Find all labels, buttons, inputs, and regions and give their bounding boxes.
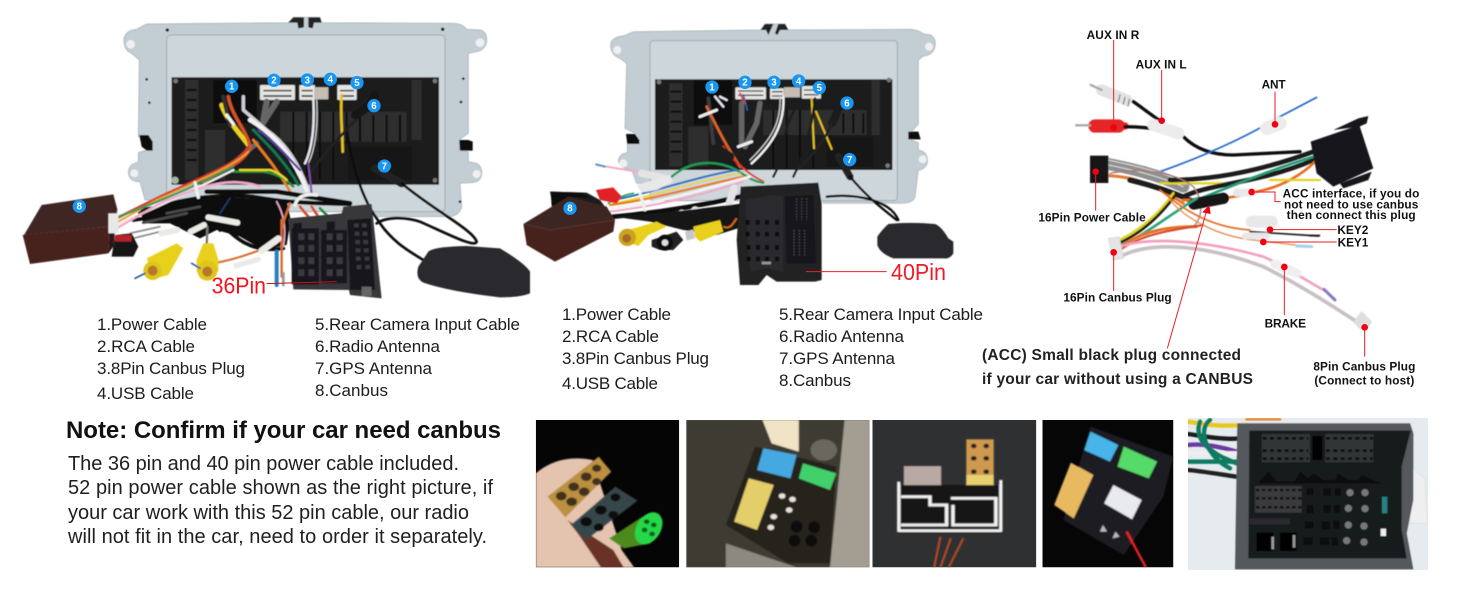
parts list: 36 pin: 6.Radio Antenna [315,337,441,356]
note body text: 52 pin power cable shown as the right picture, if [68,477,493,499]
40 pin connector [737,183,822,285]
label: KEY2: KEY2 [1337,223,1369,237]
label: BRAKE: BRAKE [1265,316,1306,330]
ACC plug note: if your car without using a CANBUS [982,371,1253,388]
canbus box 8 [523,197,615,230]
label: ANT: ANT [1262,77,1286,91]
parts list: 36 pin: 1.Power Cable [97,315,207,334]
parts list: 40 pin [562,305,983,393]
GPS antenna [877,223,953,258]
badges 1 to 8: 6 [371,101,377,112]
36 pin connector [288,204,382,298]
badges 1 to 8: 4 [328,75,334,86]
label: AUX IN L: AUX IN L [1136,58,1187,72]
label: ACC interface [1283,187,1419,222]
photo: plug block with white outline [873,420,1036,567]
16 pin canbus plug [1108,237,1124,260]
ACC plug note: (ACC) Small black plug connected [982,347,1241,364]
badges 1 to 8: 5 [817,83,823,94]
label: 8Pin Canbus Plug: 8Pin Canbus Plug [1313,360,1415,374]
ISO connector [1311,125,1373,187]
RCA plugs [1076,85,1357,322]
label: ACC interface: not need to use canbus [1284,197,1419,211]
badges 1 to 8: 6 [844,98,850,109]
black rear panel [172,77,439,185]
label: 8Pin Canbus Plug: (Connect to host) [1314,374,1414,388]
parts list: 40 pin: 3.8Pin Canbus Plug [562,349,709,368]
label: 16Pin Canbus Plug: 16Pin Canbus Plug [1063,291,1172,305]
GPS antenna [417,246,530,297]
red leader lines [1092,40,1368,357]
36Pin callout: 36Pin [212,272,266,298]
badges 1 to 8: 7 [382,161,387,172]
photo strip: plug examples [536,420,1173,567]
label: 16Pin Power Cable: 16Pin Power Cable [1038,210,1146,224]
parts list: 40 pin: 5.Rear Camera Input Cable [779,305,983,324]
badges 1 to 8: 1 [229,82,235,93]
mounting plate [611,24,935,203]
badges 1 to 8: 2 [271,76,277,87]
white plug at box [108,213,118,233]
black rear panel [655,79,892,170]
black cable loom [130,196,350,250]
parts list: 36 pin: 3.8Pin Canbus Plug [97,359,245,378]
photo: 52 pin connector [1188,418,1428,570]
badges 1 to 8: 8 [77,202,83,213]
harness diagram with labels [1038,28,1419,388]
wire bundles [1108,164,1183,187]
badges 1 to 8 [563,74,856,215]
badges 1 to 8: 4 [796,76,802,87]
parts list: 36 pin: 7.GPS Antenna [315,359,433,378]
parts list: 40 pin: 4.USB Cable [562,374,658,393]
16 pin power plug [1090,156,1108,183]
label: ACC interface: ACC interface, if you do [1283,187,1419,201]
label: 8Pin Canbus Plug [1313,360,1415,388]
label: KEY1: KEY1 [1338,236,1369,250]
40Pin callout [806,259,946,285]
note body text [67,453,493,548]
note body text: your car work with this 52 pin cable, our radio [68,502,469,524]
photo: hand holding plugs [536,420,679,567]
parts list: 36 pin: 4.USB Cable [97,384,194,403]
label: ACC interface: then connect this plug [1287,208,1416,222]
parts list: 40 pin: 8.Canbus [779,371,851,390]
40Pin callout: 40Pin [891,259,946,285]
photo: coloured plug block [1043,420,1173,567]
heading: canbus note: Note: Confirm if your car need canbus [66,417,501,444]
badges 1 to 8: 7 [847,155,852,166]
note body text: The 36 pin and 40 pin power cable included. [68,453,459,475]
parts list: 40 pin: 7.GPS Antenna [779,349,896,368]
plug row [735,86,821,99]
badges 1 to 8: 5 [354,78,360,89]
mounting plate [124,17,487,217]
yellow RCA plugs [135,243,218,281]
plug row [260,85,357,100]
badges 1 to 8: 3 [771,78,777,89]
ACC plug note [982,347,1253,388]
photo: radio back with 40 pin harness [523,24,953,285]
note body text: will not fit in the car, need to order it separately. [67,526,487,548]
wires from plugs [117,95,477,285]
badges 1 to 8: 2 [742,78,748,89]
badges 1 to 8: 1 [709,82,715,93]
photo: radio back with 36 pin harness [23,17,530,298]
36Pin callout [212,272,337,298]
parts list: 36 pin: 5.Rear Camera Input Cable [315,315,520,334]
badges 1 to 8: 3 [305,75,311,86]
parts list: 40 pin: 2.RCA Cable [562,327,659,346]
parts list: 40 pin: 6.Radio Antenna [779,327,905,346]
parts list: 36 pin [97,315,520,403]
badges 1 to 8: 8 [567,204,573,215]
RCA and AV plugs [619,218,737,251]
parts list: 36 pin: 2.RCA Cable [97,337,195,356]
black cable loom [613,203,743,235]
parts list: 40 pin: 1.Power Cable [562,305,671,324]
wires from plugs [597,92,898,220]
canbus box 8 [24,194,117,235]
label: AUX IN R: AUX IN R [1087,28,1140,42]
photo: plug block in car [686,420,870,567]
parts list: 36 pin: 8.Canbus [315,381,388,400]
8 pin canbus plug [1353,312,1372,330]
badges 1 to 8 [73,73,391,213]
